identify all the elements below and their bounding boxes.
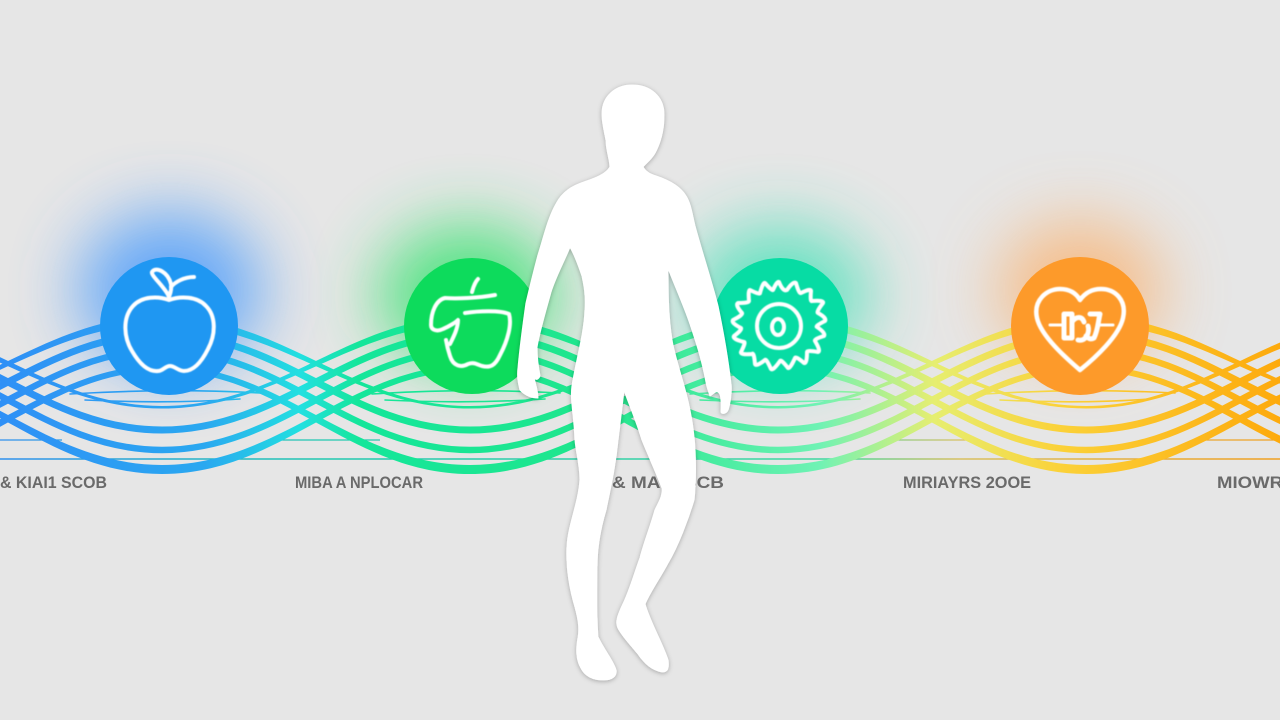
labels row — [0, 473, 1280, 492]
baseline rules — [0, 440, 1280, 459]
label 4: MIRIAYRS 2OOE — [903, 473, 1031, 492]
green glow — [378, 225, 558, 365]
icon: bitten apple, green circle — [404, 258, 540, 394]
wave family B — [0, 316, 1280, 474]
label 5: MIOWR — [1217, 473, 1280, 492]
human silhouette — [518, 85, 731, 680]
icon: gear, teal circle — [712, 258, 848, 394]
orange glow — [998, 222, 1162, 358]
icon: heart with link, orange circle — [1011, 257, 1149, 395]
flat inner strands — [70, 391, 1175, 402]
label 3: & MAIA SCB — [612, 473, 724, 492]
label 2: MIBA A NPLOCAR — [295, 473, 423, 492]
label 1: & KIAI1 SCOB — [0, 473, 107, 492]
flowing wave ribbons — [0, 316, 1280, 474]
teal glow — [690, 225, 870, 365]
wave family A — [0, 316, 1280, 474]
icon: apple, blue circle — [100, 257, 238, 395]
blue glow — [78, 212, 262, 368]
